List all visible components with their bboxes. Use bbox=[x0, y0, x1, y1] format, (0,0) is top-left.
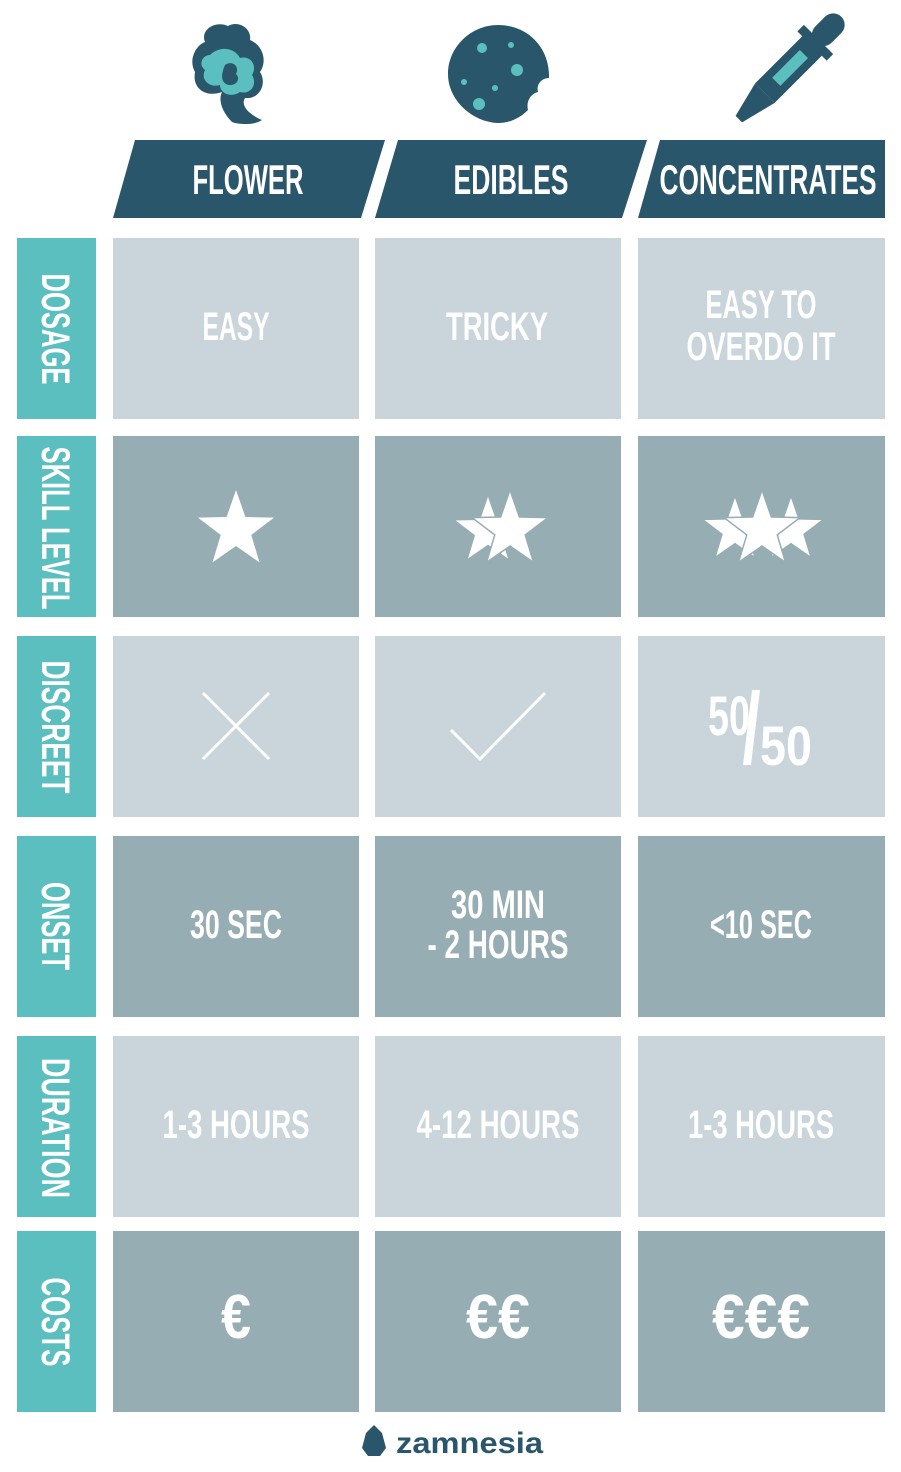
label: dosage: DOSAGE bbox=[33, 274, 77, 384]
header: edibles: EDIBLES bbox=[454, 156, 568, 203]
cell: edibles two stars bbox=[375, 436, 621, 617]
icon: dropper bbox=[724, 2, 856, 134]
label: skill level bbox=[17, 436, 96, 617]
label: onset bbox=[17, 836, 96, 1017]
label: skill level: SKILL LEVEL bbox=[33, 446, 77, 610]
label: dosage bbox=[17, 238, 96, 419]
cell: concentrates dosage: EASY TO bbox=[706, 283, 816, 327]
cell: edibles dosage: TRICKY bbox=[446, 305, 548, 349]
cell: edibles cost: €€ bbox=[466, 1283, 530, 1352]
row: skill level bbox=[17, 436, 885, 617]
cell: concentrates three stars bbox=[638, 436, 885, 617]
cell: flower duration: 1-3 HOURS bbox=[162, 1103, 310, 1147]
cell: edibles onset: 30 MIN bbox=[451, 883, 545, 927]
cell: concentrates duration: 1-3 HOURS bbox=[688, 1103, 834, 1147]
cell: flower duration bbox=[113, 1036, 359, 1217]
cell: edibles check bbox=[375, 636, 621, 817]
cell: flower one star bbox=[113, 436, 359, 617]
label: duration bbox=[17, 1036, 96, 1217]
icon: cookie bbox=[448, 25, 549, 123]
cell: concentrates 50/50: 50 bbox=[760, 714, 812, 777]
label: onset: ONSET bbox=[33, 882, 77, 970]
label: discreet: DISCREET bbox=[33, 660, 77, 794]
header: flower: FLOWER bbox=[192, 156, 304, 203]
cell: edibles duration bbox=[375, 1036, 621, 1217]
label: costs bbox=[17, 1231, 96, 1412]
cell: concentrates onset bbox=[638, 836, 885, 1017]
row: discreet bbox=[17, 636, 885, 817]
header: concentrates bbox=[638, 140, 885, 218]
cell: edibles onset: - 2 HOURS bbox=[428, 923, 568, 967]
row: onset bbox=[17, 836, 885, 1017]
cell: concentrates dosage bbox=[638, 238, 885, 419]
cell: flower onset bbox=[113, 836, 359, 1017]
cell: edibles duration: 4-12 HOURS bbox=[416, 1103, 580, 1147]
cell: flower cross bbox=[113, 636, 359, 817]
cell: edibles cost bbox=[375, 1231, 621, 1412]
cell: concentrates 50/50 bbox=[638, 636, 885, 817]
cell: flower onset: 30 SEC bbox=[190, 903, 282, 947]
cell: concentrates cost: €€€ bbox=[712, 1283, 810, 1352]
row: costs bbox=[17, 1231, 885, 1412]
cell: concentrates 50/50: 50 bbox=[708, 684, 750, 747]
logo: zamnesia: zamnesia bbox=[396, 1427, 543, 1460]
header: edibles bbox=[375, 140, 647, 218]
cell: flower cost bbox=[113, 1231, 359, 1412]
label: costs: COSTS bbox=[33, 1278, 77, 1366]
row: duration bbox=[17, 1036, 885, 1217]
cell: flower cost: € bbox=[221, 1283, 251, 1352]
cell: flower dosage bbox=[113, 238, 359, 419]
cell: concentrates cost bbox=[638, 1231, 885, 1412]
cell: concentrates dosage: OVERDO IT bbox=[686, 325, 836, 369]
label: discreet bbox=[17, 636, 96, 817]
icon: flower bud bbox=[192, 24, 264, 124]
cell: flower dosage: EASY bbox=[202, 305, 270, 349]
label: duration: DURATION bbox=[33, 1058, 77, 1198]
row: dosage bbox=[17, 238, 885, 419]
cell: edibles dosage bbox=[375, 238, 621, 419]
cell: concentrates onset: <10 SEC bbox=[710, 903, 812, 947]
cell: edibles onset bbox=[375, 836, 621, 1017]
header: flower bbox=[113, 140, 385, 218]
cell: concentrates duration bbox=[638, 1036, 885, 1217]
